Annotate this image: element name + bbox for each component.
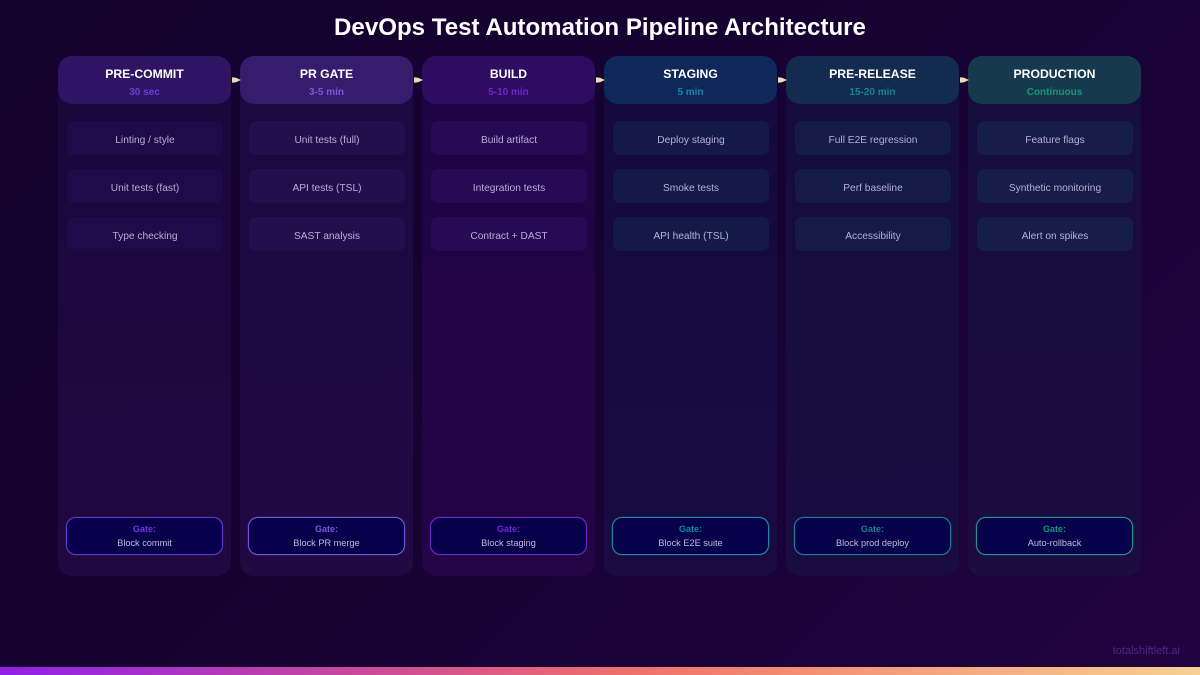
header: PR gate: PR GATE: [300, 67, 353, 81]
panel: pre-commit stage: [58, 56, 231, 576]
step: accessibility: Accessibility: [845, 231, 901, 242]
step: perf baseline: [795, 169, 951, 203]
arrow: staging to pre-release: [778, 77, 787, 83]
gate: block E2E suite: [612, 517, 769, 555]
step: API health: API health (TSL): [653, 231, 729, 242]
step: integration tests: Integration tests: [473, 183, 545, 194]
header: pre-release: 15-20 min: [849, 87, 896, 98]
header: production: Continuous: [1027, 87, 1082, 98]
gate: block PR merge: Gate:: [315, 524, 338, 534]
step: build artifact: Build artifact: [481, 135, 537, 146]
arrow: pre-commit to PR gate: [232, 77, 241, 83]
gate: block prod deploy: Block prod deploy: [836, 538, 909, 548]
header: production: PRODUCTION: [1014, 67, 1095, 81]
header: pre-commit: PRE-COMMIT: [105, 67, 184, 81]
header: build: 5-10 min: [488, 87, 529, 98]
arrow: pre-release to production: [960, 77, 969, 83]
gate: auto-rollback: Gate:: [1043, 524, 1066, 534]
gate: block E2E suite: Gate:: [679, 524, 702, 534]
gate: block commit: Block commit: [117, 538, 172, 548]
header: staging: 5 min: [677, 87, 704, 98]
header: build: BUILD: [490, 67, 527, 81]
step: perf baseline: Perf baseline: [843, 183, 903, 194]
header: pre-release: [786, 56, 959, 104]
step: smoke tests: [613, 169, 769, 203]
header: staging: [604, 56, 777, 104]
step: accessibility: [795, 217, 951, 251]
header: PR gate: 3-5 min: [309, 87, 344, 98]
panel: production stage: [968, 56, 1141, 576]
arrow: PR gate to build: [414, 77, 423, 83]
panel: pre-release stage: [786, 56, 959, 576]
step: type checking: Type checking: [112, 231, 178, 242]
step: build artifact: [431, 121, 587, 155]
step: linting: [67, 121, 223, 155]
gradient footer bar: [0, 667, 1200, 675]
arrow: build to staging: [596, 77, 605, 83]
step: contract and DAST: Contract + DAST: [470, 231, 548, 242]
step: smoke tests: Smoke tests: [663, 183, 719, 194]
step: unit tests full: Unit tests (full): [294, 135, 360, 146]
step: full E2E regression: [795, 121, 951, 155]
gate: block prod deploy: Gate:: [861, 524, 884, 534]
header: pre-commit: 30 sec: [129, 87, 160, 98]
step: synthetic monitoring: Synthetic monitoring: [1009, 183, 1101, 194]
step: unit tests full: [249, 121, 405, 155]
step: integration tests: [431, 169, 587, 203]
panel: PR gate stage: [240, 56, 413, 576]
header: staging: STAGING: [663, 67, 718, 81]
step: feature flags: Feature flags: [1025, 135, 1085, 146]
step: deploy staging: Deploy staging: [657, 135, 725, 146]
gate: block PR merge: [248, 517, 405, 555]
step: feature flags: [977, 121, 1133, 155]
step: unit tests fast: Unit tests (fast): [111, 183, 179, 194]
step: deploy staging: [613, 121, 769, 155]
header: PR gate: [240, 56, 413, 104]
gate: auto-rollback: [976, 517, 1133, 555]
step: type checking: [67, 217, 223, 251]
step: API health: [613, 217, 769, 251]
gate: block staging: [430, 517, 587, 555]
step: synthetic monitoring: [977, 169, 1133, 203]
header: production: [968, 56, 1141, 104]
step: linting: Linting / style: [115, 135, 175, 146]
header: pre-commit: [58, 56, 231, 104]
panel: staging stage: [604, 56, 777, 576]
header: pre-release: PRE-RELEASE: [829, 67, 916, 81]
gate: block staging: Block staging: [481, 538, 536, 548]
step: full E2E regression: Full E2E regression: [829, 135, 917, 146]
panel: build stage: [422, 56, 595, 576]
header: build: [422, 56, 595, 104]
gate: block staging: Gate:: [497, 524, 520, 534]
step: API tests: API tests (TSL): [292, 183, 362, 194]
step: contract and DAST: [431, 217, 587, 251]
gate: block E2E suite: Block E2E suite: [658, 538, 723, 548]
step: SAST analysis: SAST analysis: [294, 231, 360, 242]
step: SAST analysis: [249, 217, 405, 251]
brand label: totalshiftleft.ai: [1113, 645, 1180, 657]
title: DevOps Test Automation Pipeline Architecture: [334, 14, 866, 41]
step: API tests: [249, 169, 405, 203]
gate: block PR merge: Block PR merge: [293, 538, 360, 548]
gate: block commit: [66, 517, 223, 555]
step: unit tests fast: [67, 169, 223, 203]
gate: block prod deploy: [794, 517, 951, 555]
step: alert on spikes: [977, 217, 1133, 251]
gate: block commit: Gate:: [133, 524, 156, 534]
step: alert on spikes: Alert on spikes: [1022, 231, 1088, 242]
gate: auto-rollback: Auto-rollback: [1028, 538, 1081, 548]
